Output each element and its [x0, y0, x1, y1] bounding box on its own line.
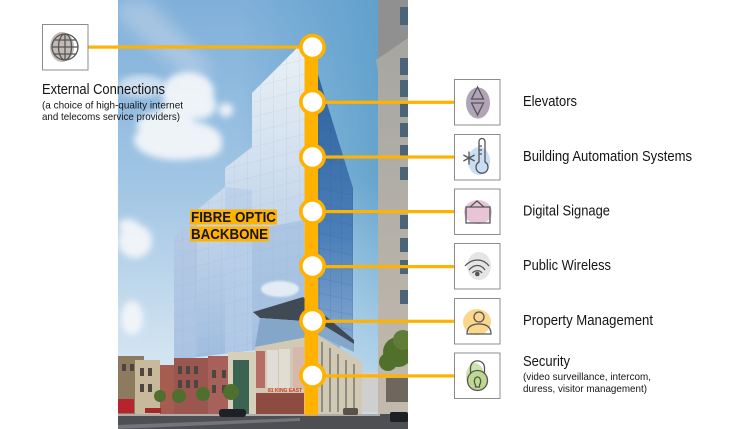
building photograph: [118, 0, 413, 429]
icon: padlock: [454, 353, 500, 398]
podium: 81 KING EAST: [268, 388, 302, 394]
overhang: [253, 297, 354, 344]
fibre optic backbone line: [304, 47, 318, 415]
label: public wireless: Public Wireless: [523, 258, 611, 274]
stone tower: [376, 0, 408, 414]
text: external connections: External Connections: [42, 82, 165, 98]
label: building automation systems: Building Automation Systems: [523, 149, 692, 165]
label: fibre optic backbone: BACKBONE: [191, 226, 268, 243]
text: security: [523, 354, 651, 395]
label: fibre optic backbone: FIBRE OPTIC: [191, 209, 276, 226]
icon: thermometer: [454, 134, 500, 180]
connector: security: [318, 374, 455, 378]
icon: globe: [42, 24, 88, 70]
text: security: Security: [523, 354, 571, 370]
text: security: (video surveillance, intercom,: [523, 371, 651, 383]
clouds: [118, 72, 233, 335]
icon: elevators: [454, 80, 500, 125]
label: property management: Property Management: [523, 313, 653, 329]
icon: wifi: [454, 244, 500, 289]
connector: digital signage: [318, 210, 455, 213]
connector: building automation: [318, 155, 455, 159]
icon: digital signage: [454, 189, 500, 234]
text: external connections: [42, 82, 183, 123]
label: fibre optic backbone: [190, 209, 277, 243]
label: digital signage: Digital Signage: [523, 204, 610, 220]
connector: property management: [318, 320, 455, 323]
connector: external connections: [88, 46, 300, 49]
text: external connections: and telecoms service providers): [42, 111, 180, 123]
backbone nodes: [301, 35, 324, 387]
glass tower tiers: [174, 47, 316, 360]
connector: elevators: [318, 101, 455, 104]
sky: [118, 0, 378, 365]
podium: [255, 335, 362, 414]
label: elevators: Elevators: [523, 94, 577, 110]
far building: [362, 372, 378, 412]
connector: public wireless: [318, 265, 455, 268]
glass tower dark side: [316, 68, 353, 342]
icon: person: [454, 298, 500, 344]
street buildings: [118, 352, 256, 414]
text: security: duress, visitor management): [523, 383, 647, 395]
text: external connections: (a choice of high-quality internet: [42, 100, 183, 112]
street: [118, 414, 408, 429]
